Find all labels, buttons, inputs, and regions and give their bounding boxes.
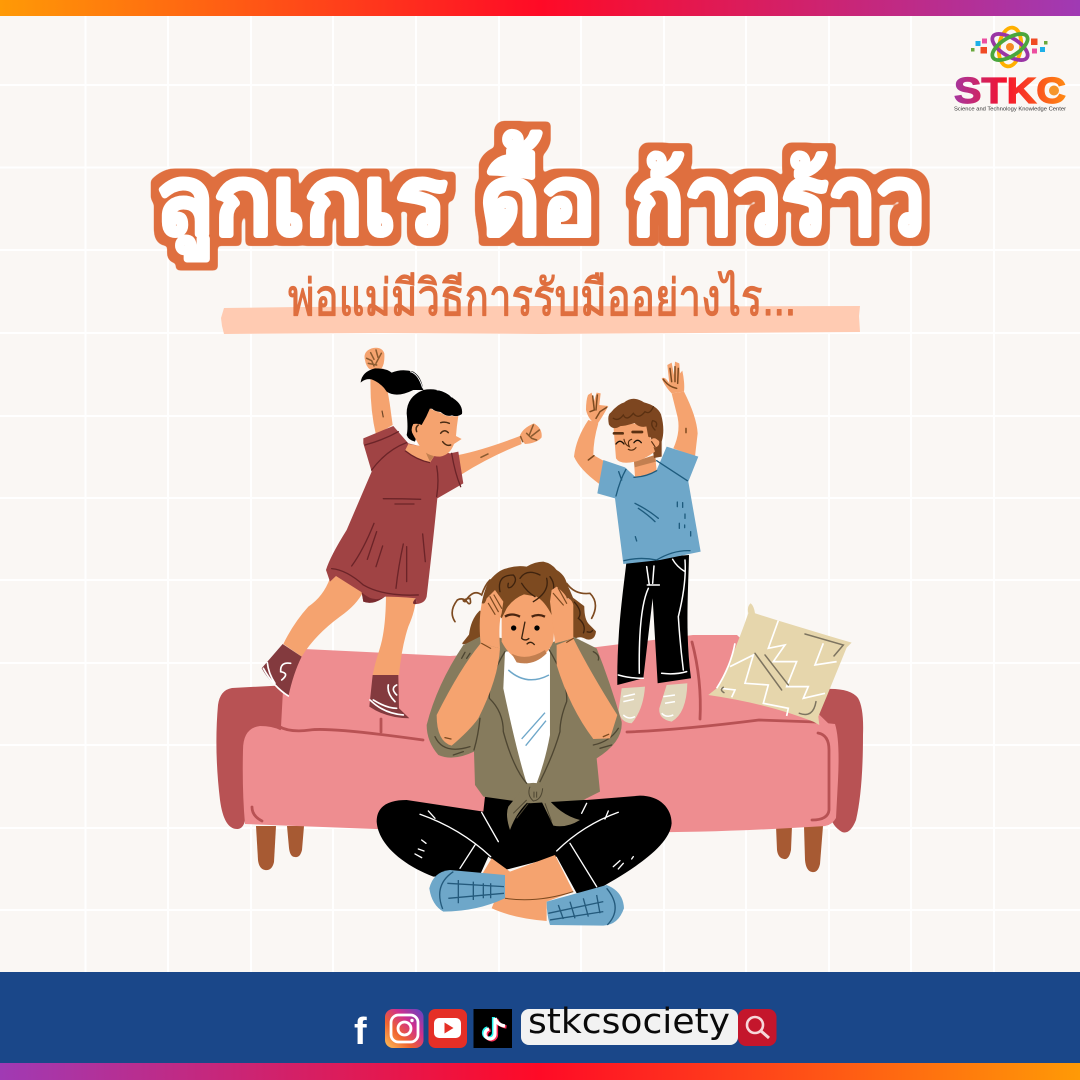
sofa backrest [280, 635, 830, 745]
mother hair top [482, 562, 573, 618]
mother hands [480, 590, 503, 648]
search text: stkcsociety [528, 1002, 730, 1042]
mother facial features [505, 614, 545, 645]
girl face [412, 408, 462, 457]
girl raised arm [370, 368, 393, 435]
icon: instagram [385, 1009, 424, 1048]
STKC logo [954, 26, 1066, 113]
illustration: sofa [216, 635, 863, 872]
girl legs [283, 570, 365, 657]
boy pants [617, 555, 691, 685]
boy shoes [619, 687, 645, 723]
sofa seat [243, 720, 839, 832]
boy hair [609, 400, 662, 441]
title: ดื้อ [480, 130, 596, 255]
mother knot [507, 783, 580, 830]
mother jacket [427, 635, 622, 803]
illustration: girl jumping [262, 348, 542, 718]
illustration: pillow [708, 603, 852, 725]
title: ก้าวร้าว [632, 148, 925, 255]
boy hair back [649, 427, 662, 458]
footer band [0, 972, 1080, 1063]
boy arm right [672, 392, 698, 457]
boy neck [634, 455, 657, 477]
boy shirt [597, 447, 701, 564]
mother loose curls [452, 580, 595, 622]
mother arms [437, 643, 500, 746]
boy face [613, 423, 655, 463]
icon: youtube [428, 1009, 467, 1048]
bottom gradient bar [0, 1063, 1080, 1080]
title [155, 130, 925, 261]
search pill [521, 1002, 738, 1045]
boy arm left [574, 420, 605, 484]
girl ponytail [361, 368, 423, 395]
mother hair locks [463, 612, 483, 643]
mother face [502, 590, 555, 663]
logo wordmark: STKC [954, 70, 1066, 111]
illustration: stressed mother [377, 562, 672, 926]
icon: facebook: f [354, 1011, 367, 1053]
girl dress [326, 426, 463, 604]
girl neck [405, 444, 436, 463]
sofa seams [252, 642, 829, 821]
sofa arm right [790, 689, 863, 832]
subtitle highlight brush [221, 306, 860, 334]
title: ลูกเกเร [155, 148, 447, 261]
mother shoes [429, 870, 505, 912]
top gradient bar [0, 0, 1080, 16]
logo tagline: Science and Technology Knowledge Center [954, 106, 1066, 112]
mother jacket lines [435, 648, 618, 783]
sofa legs [256, 826, 823, 872]
girl shoes [262, 644, 302, 697]
girl hair [407, 389, 462, 442]
mother leggings [377, 796, 672, 893]
mother shirt [503, 648, 550, 783]
icon: search button [738, 1009, 776, 1046]
girl extended arm [458, 436, 522, 474]
mother legs skin [482, 855, 573, 921]
subtitle: พ่อแม่มีวิธีการรับมืออย่างไร... [288, 270, 796, 326]
illustration: boy jumping [574, 362, 701, 723]
icon: tiktok [474, 1009, 512, 1048]
logo atom icon [971, 26, 1048, 68]
sofa arm left [216, 685, 290, 829]
